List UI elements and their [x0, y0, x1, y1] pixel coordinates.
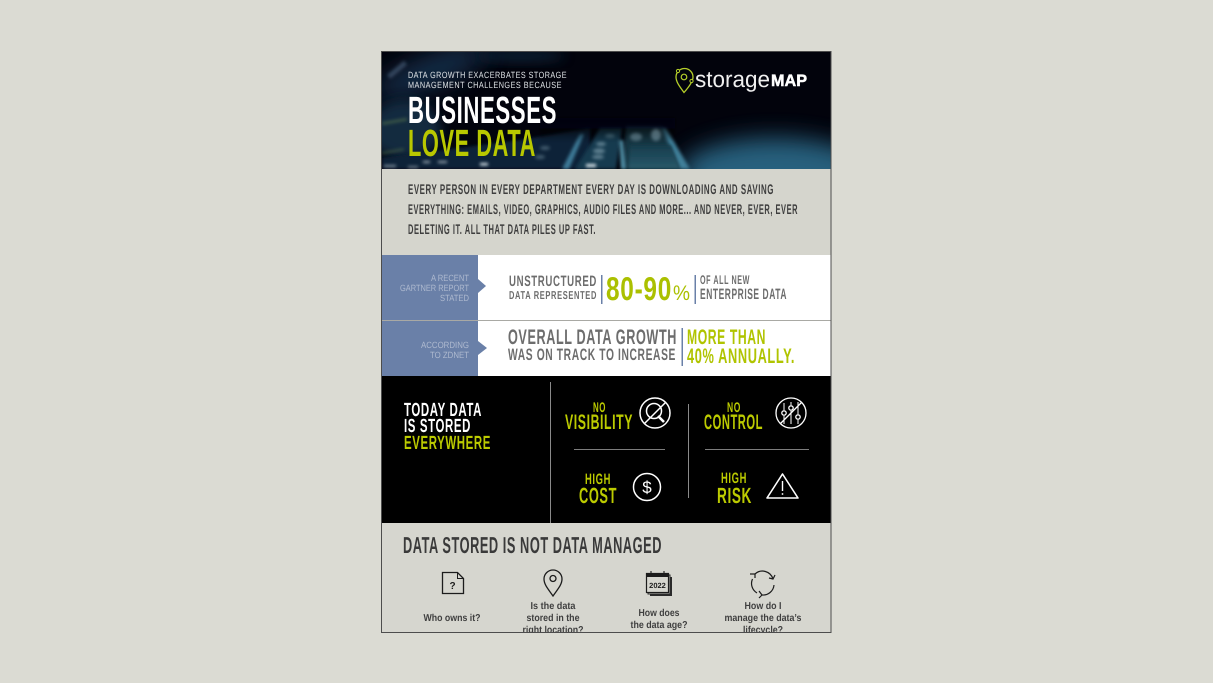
- title: BUSINESSES: [408, 90, 557, 132]
- icon: crossed sliders: [776, 398, 806, 428]
- source tag: ZDNet: ACCORDING: [421, 340, 469, 350]
- source tag: ZDNet: [382, 321, 487, 376]
- header eyebrow text: [408, 70, 567, 90]
- statistic: 40% annually: WAS ON TRACK TO INCREASE: [508, 346, 676, 364]
- source tag: ZDNet: TO ZDNET: [430, 350, 469, 360]
- icon: 2022 calendar: [646, 571, 672, 596]
- label: high risk: HIGH: [721, 470, 747, 487]
- caption: lifecycle: [725, 602, 802, 632]
- heading: today data: IS STORED: [404, 416, 471, 437]
- label: high cost: HIGH: [585, 471, 611, 488]
- source tag: Gartner: [382, 255, 486, 320]
- caption: right location: right location?: [522, 625, 584, 636]
- logo: storageMAP: MAP: [771, 72, 807, 90]
- statistic: 40% annually: 40% ANNUALLY.: [687, 345, 795, 368]
- source tag: Gartner: A RECENT: [431, 273, 469, 283]
- icon: dollar: [634, 474, 660, 500]
- icon: lifecycle arrows: [750, 571, 775, 598]
- row divider: [382, 320, 831, 321]
- caption: lifecycle: manage the data’s: [724, 613, 802, 624]
- statistic: 40% annually: OVERALL DATA GROWTH: [508, 326, 677, 349]
- source tag: Gartner: STATED: [440, 293, 469, 303]
- label: no control: CONTROL: [704, 411, 763, 434]
- heading: today data: TODAY DATA: [404, 400, 482, 421]
- label: no visibility: NO: [593, 399, 606, 415]
- statistic: 40% annually: MORE THAN: [687, 326, 766, 349]
- panel: Gartner statistic row: [382, 255, 831, 320]
- intro paragraph: [408, 181, 798, 237]
- label: high risk: [717, 470, 752, 508]
- icon: warning triangle: [767, 474, 798, 498]
- label: high cost: COST: [579, 483, 617, 508]
- caption: right location: Is the data: [530, 601, 576, 612]
- statistic: 40% annually: [508, 326, 795, 368]
- caption: data age: the data age?: [630, 620, 688, 631]
- label: no visibility: [565, 399, 633, 434]
- statistic: 80-90%: [509, 270, 787, 307]
- panel: intro background: [382, 169, 831, 255]
- statistic: 80-90%: OF ALL NEW: [700, 273, 750, 287]
- icon: dollar: $: [642, 478, 652, 497]
- heading: today data: EVERYWHERE: [404, 433, 491, 454]
- caption: data age: [630, 608, 688, 631]
- panel: today data is stored everywhere: [382, 376, 831, 523]
- statistic: 80-90%: 80-90: [606, 270, 672, 307]
- caption: data age: How does: [638, 608, 680, 619]
- label: no control: NO: [727, 399, 741, 415]
- heading: DATA STORED IS NOT DATA MANAGED: [403, 532, 662, 558]
- panel: data stored is not data managed: [404, 537, 802, 632]
- label: no visibility: VISIBILITY: [565, 411, 633, 434]
- label: high risk: RISK: [717, 483, 752, 508]
- icon: document question: [442, 572, 464, 594]
- logo: storageMAP: storage: [695, 66, 770, 92]
- title: [408, 90, 557, 165]
- header eyebrow text: MANAGEMENT CHALLENGES BECAUSE: [408, 80, 562, 90]
- statistic: 80-90%: DATA REPRESENTED: [509, 290, 597, 302]
- statistic: 80-90%: %: [673, 282, 690, 305]
- icon: document question: ?: [449, 581, 456, 592]
- source tag: Gartner: GARTNER REPORT: [400, 283, 469, 293]
- caption: right location: [523, 602, 583, 632]
- heading: today data: [404, 400, 491, 454]
- statistic: 80-90%: ENTERPRISE DATA: [700, 286, 787, 303]
- panel: header banner: [382, 52, 830, 169]
- logo: storageMAP: [676, 66, 807, 92]
- intro paragraph: DELETING IT. ALL THAT DATA PILES UP FAST.: [408, 221, 596, 237]
- icon: location pin: [544, 570, 562, 596]
- title: LOVE DATA: [408, 123, 536, 165]
- infographic canvas: [381, 51, 832, 633]
- header eyebrow text: DATA GROWTH EXACERBATES STORAGE: [408, 70, 567, 80]
- caption: lifecycle: How do I: [744, 601, 782, 612]
- label: no control: [704, 399, 763, 434]
- caption: lifecycle: lifecycle?: [743, 625, 783, 636]
- caption: right location: stored in the: [526, 613, 580, 624]
- intro paragraph: EVERYTHING: EMAILS, VIDEO, GRAPHICS, AUDIO FILES AND MORE... AND NEVER, EVER, EVER: [408, 201, 798, 217]
- icon: crossed magnifier: [640, 398, 670, 428]
- intro paragraph: EVERY PERSON IN EVERY DEPARTMENT EVERY DAY IS DOWNLOADING AND SAVING: [408, 181, 774, 197]
- panel: ZDNet statistic row: [382, 321, 831, 376]
- caption: who owns it: Who owns it?: [424, 613, 480, 624]
- statistic: 80-90%: UNSTRUCTURED: [509, 273, 597, 290]
- icon: 2022 calendar: 2022: [649, 581, 666, 590]
- card border: [382, 52, 831, 632]
- label: high cost: [579, 471, 617, 508]
